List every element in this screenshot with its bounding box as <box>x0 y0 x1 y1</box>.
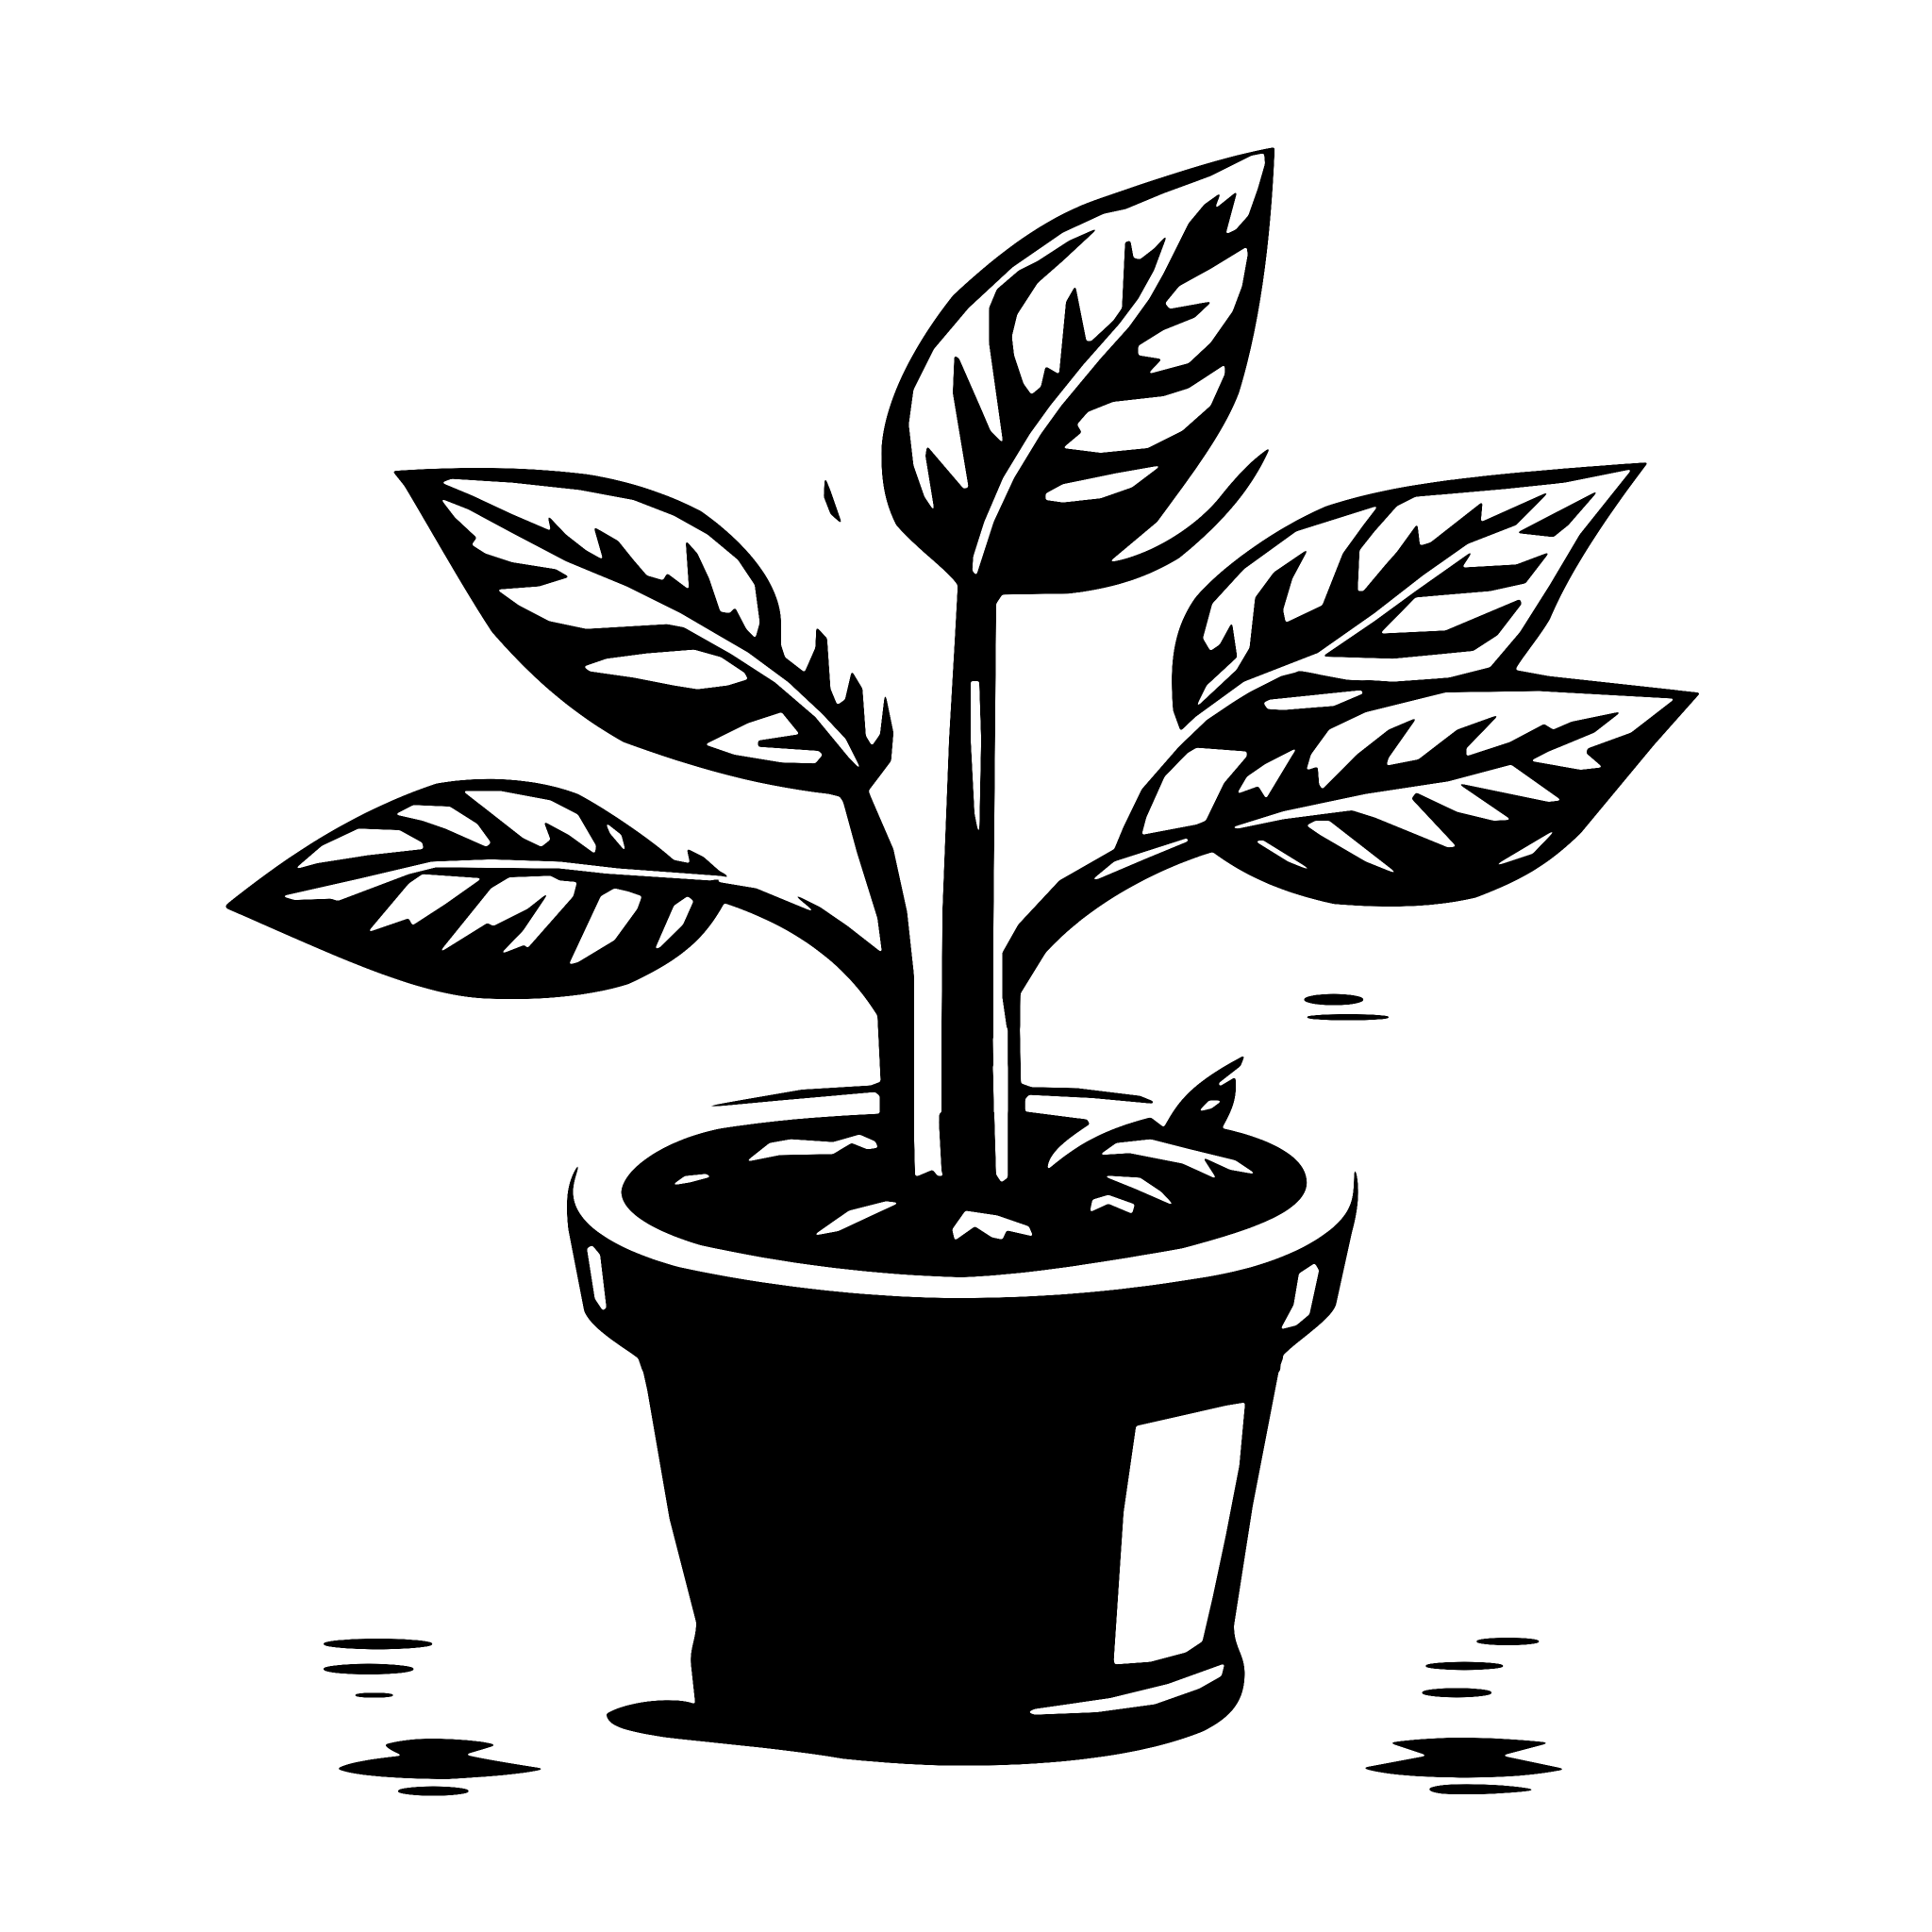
central stem <box>941 590 1004 1038</box>
upper left leaf <box>392 468 893 821</box>
lower right leaf and branch <box>1002 651 1701 1028</box>
ground marks right of pot <box>1362 1638 1566 1794</box>
ground marks right of stem <box>1304 994 1391 1021</box>
small floating leaf fragment <box>824 476 842 525</box>
pot body <box>607 1349 1283 1766</box>
ground marks left of pot <box>323 1639 545 1796</box>
lower left leaf and branches <box>225 779 914 1163</box>
top leaf <box>881 147 1274 595</box>
pot rim and soil <box>567 1028 1358 1371</box>
upper right leaf <box>1172 462 1648 747</box>
